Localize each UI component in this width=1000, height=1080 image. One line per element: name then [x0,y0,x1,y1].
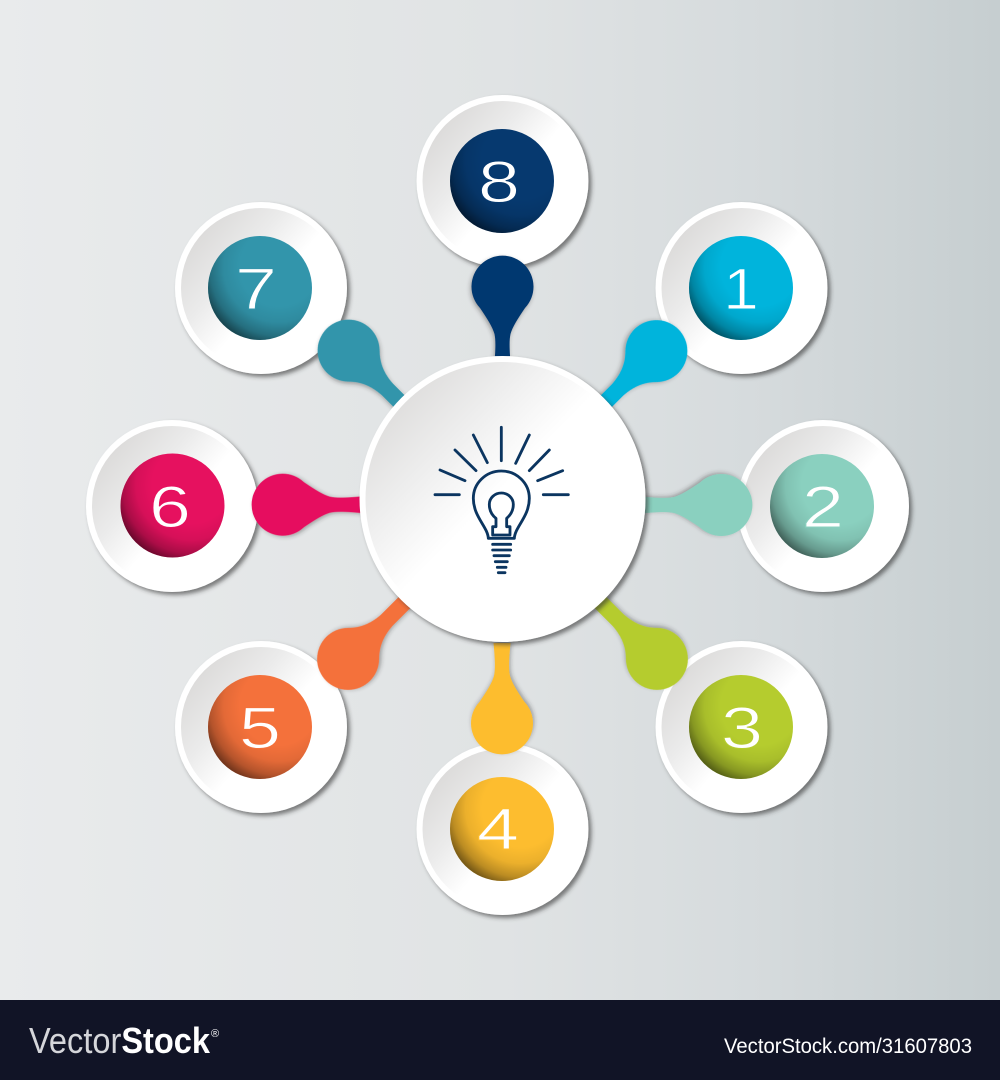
circle 3: 3 [721,696,763,761]
circle 3 [656,641,828,813]
circle 2 [737,420,909,592]
registered mark: ® [211,1028,219,1040]
circle 1 [656,202,828,374]
connector 3 [579,581,701,703]
icon: light bulb [435,427,568,573]
circle 2: 2 [802,475,844,540]
circle 8: 8 [478,150,520,215]
connector 2 [641,474,752,536]
circle 4 [416,743,588,915]
circle 7: 7 [235,257,277,322]
circle 6: 6 [149,475,191,540]
circle 1: 1 [723,257,759,321]
circle 5: 5 [239,696,281,761]
circle 7 [175,202,347,374]
connector 6 [252,474,363,536]
connector 7 [305,307,427,429]
connector 1 [578,307,700,429]
circle 8 [416,95,588,267]
connector 8 [472,256,534,367]
footer bar [0,1000,1000,1080]
connector 4 [471,643,533,754]
connector 5 [304,581,426,703]
circle 5 [175,641,347,813]
central hub [360,356,646,642]
circle 6 [86,420,258,592]
footer image id: VectorStock.com/31607803 [724,1035,972,1058]
footer logo: VectorStock [29,1020,211,1061]
circle 4: 4 [477,797,519,862]
